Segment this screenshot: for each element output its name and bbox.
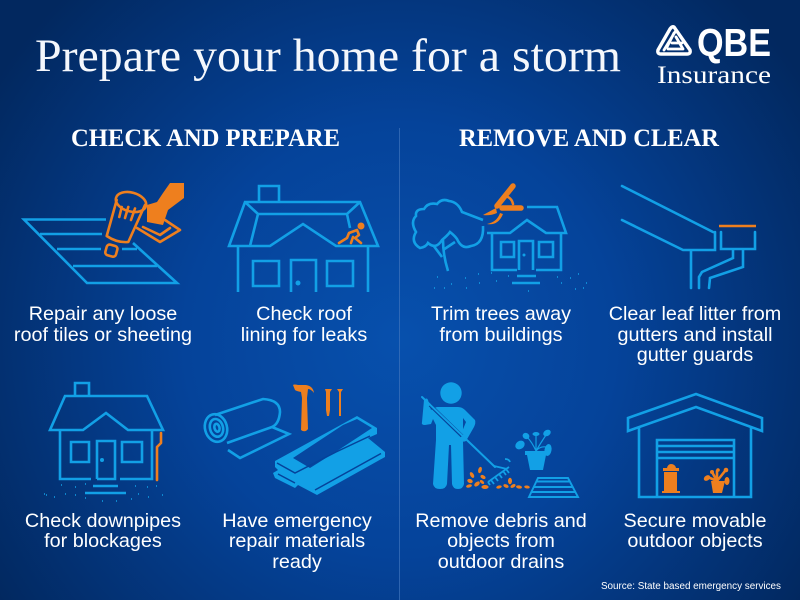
- icon: gutter: [622, 186, 756, 288]
- captions row 2: [25, 510, 766, 573]
- icon: roof tiles and nail gun: [24, 183, 184, 283]
- icon: trim trees: [413, 186, 587, 291]
- icon: person raking: [422, 382, 578, 497]
- heading: remove and clear: REMOVE AND CLEAR: [459, 125, 720, 152]
- caption: repair materials: [229, 530, 365, 552]
- pruning shears: [483, 186, 521, 224]
- caption: roof tiles or sheeting: [14, 324, 192, 346]
- icon: emergency materials: [202, 384, 385, 495]
- leaves: [466, 466, 530, 489]
- captions row 1: [14, 303, 781, 366]
- logo subtitle: Insurance: [657, 62, 771, 89]
- caption: gutters and install: [617, 324, 773, 346]
- caption: Check downpipes: [25, 510, 181, 532]
- caption: Check roof: [256, 303, 352, 325]
- caption: ready: [272, 551, 322, 573]
- caption: Repair any loose: [29, 303, 177, 325]
- caption: Have emergency: [222, 510, 372, 532]
- icon: house downpipes: [44, 383, 163, 501]
- caption: Secure movable: [624, 510, 766, 532]
- caption: Remove debris and: [415, 510, 587, 532]
- caption: outdoor drains: [438, 551, 564, 573]
- logo: QBE Insurance: [657, 22, 771, 89]
- stacked boards: [273, 416, 385, 495]
- caption: lining for leaks: [241, 324, 367, 346]
- icon: house roof inspection: [229, 186, 378, 292]
- caption: objects from: [447, 530, 555, 552]
- logo wordmark: QBE: [697, 22, 771, 65]
- caption: Trim trees away: [431, 303, 571, 325]
- wheelie bin: [662, 464, 680, 493]
- drain: [529, 478, 578, 497]
- caption: for blockages: [44, 530, 162, 552]
- ground specks: [434, 273, 587, 291]
- potted plant: [514, 428, 552, 470]
- icon: garage: [628, 394, 762, 497]
- caption: gutter guards: [637, 344, 753, 366]
- icon: QBE triangle mark: [658, 27, 690, 54]
- worker: [339, 222, 364, 243]
- potted plant: [703, 468, 730, 493]
- rake head: [488, 459, 510, 485]
- source note: Source: State based emergency services: [601, 581, 781, 592]
- caption: outdoor objects: [627, 530, 763, 552]
- title: Prepare your home for a storm: [35, 30, 621, 82]
- hammer and screws: [293, 384, 343, 431]
- caption: Clear leaf litter from: [609, 303, 781, 325]
- caption: from buildings: [439, 324, 563, 346]
- heading: check and prepare: CHECK AND PREPARE: [71, 125, 340, 152]
